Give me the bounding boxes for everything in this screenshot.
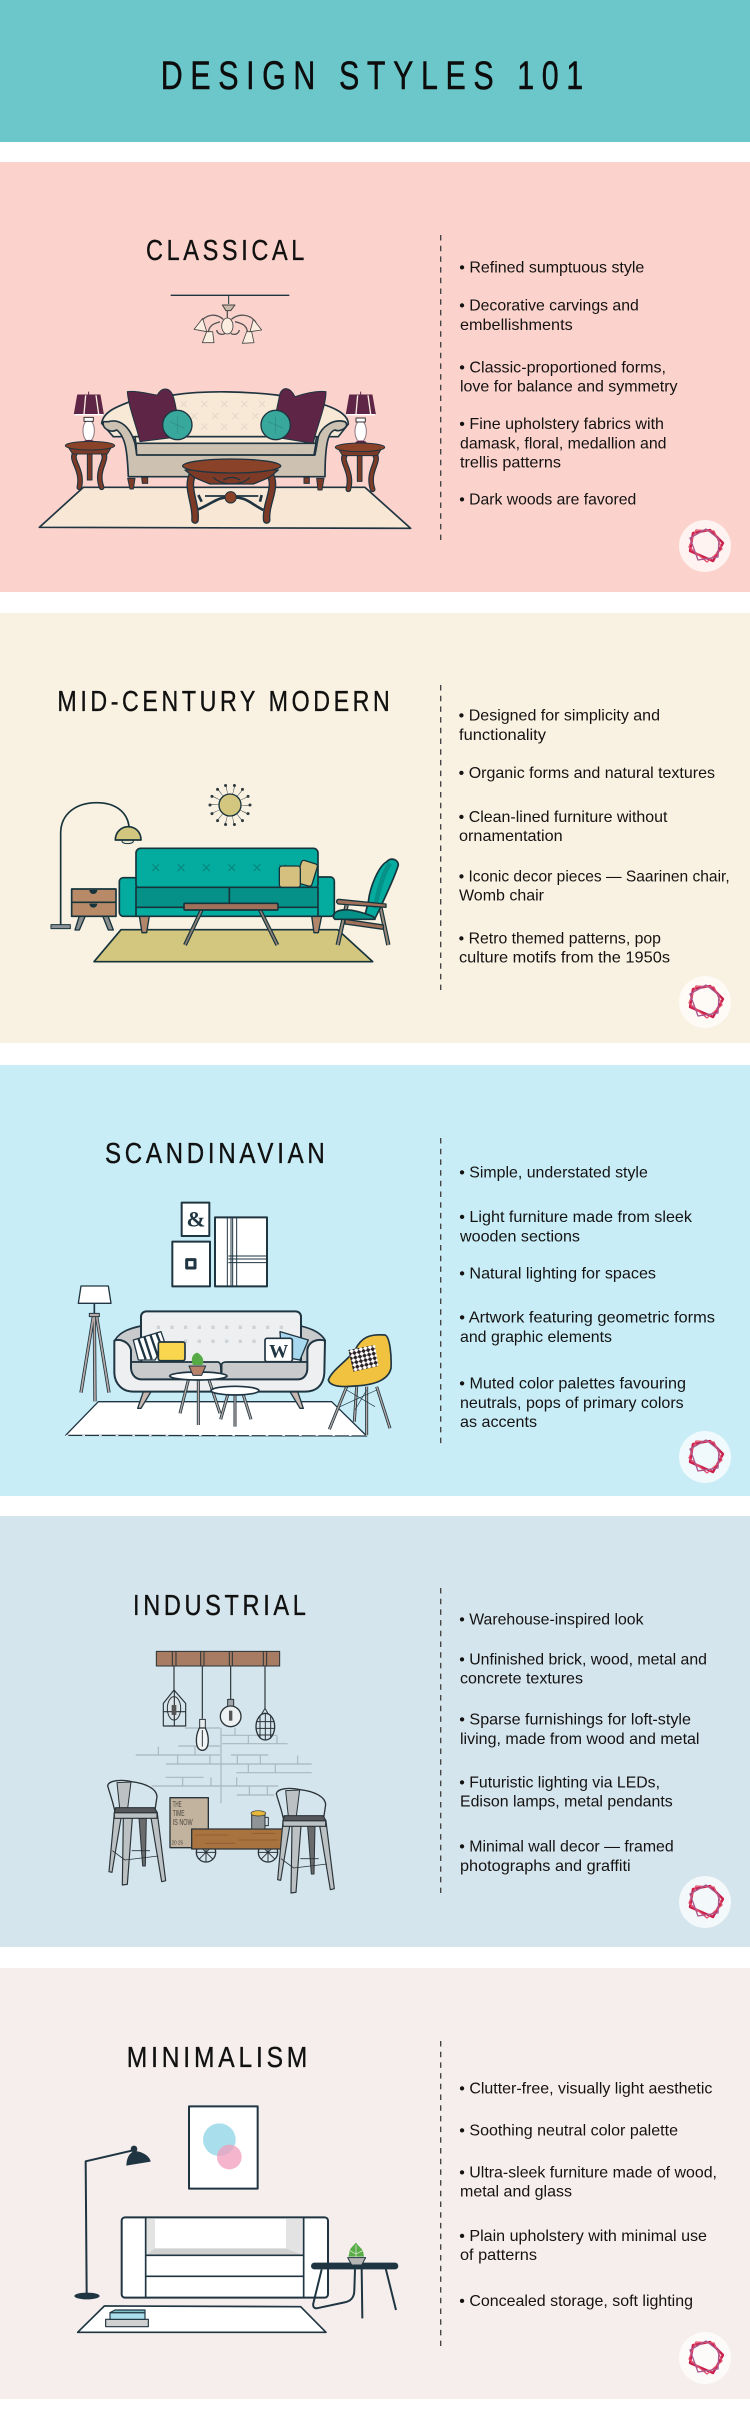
side table with plant	[311, 2243, 398, 2318]
bullet list: minimalism	[459, 2081, 717, 2310]
floor lamp	[51, 803, 141, 929]
panel: minimalism	[0, 1968, 750, 2399]
rug	[39, 487, 411, 528]
panel: scandinavian	[0, 1065, 750, 1496]
sofa	[114, 1311, 325, 1408]
header banner	[0, 0, 750, 142]
yellow chair	[328, 1335, 391, 1435]
dashed divider	[440, 1588, 442, 1893]
bullet list: minimalism: • Plain upholstery with minimal use	[459, 2228, 707, 2245]
bullet list: industrial: • Sparse furnishings for loft-style	[459, 1712, 691, 1729]
bullet list: industrial: • Warehouse-inspired look	[459, 1611, 644, 1628]
bullet list: mid-century: • Organic forms and natural textures	[459, 765, 715, 782]
bullet list: minimalism: of patterns	[460, 2247, 537, 2264]
sofa	[122, 2217, 328, 2298]
illustration: scandinavian living room	[66, 1203, 391, 1436]
illustration: industrial loft	[108, 1651, 334, 1893]
heading: industrial: INDUSTRIAL	[133, 1590, 310, 1622]
logo badge	[679, 520, 731, 572]
panel: mid-century modern	[0, 613, 750, 1043]
bullet list: classical: • Decorative carvings and	[459, 298, 639, 315]
bullet list: industrial: • Futuristic lighting via LEDs,	[459, 1774, 660, 1791]
dashed divider	[440, 685, 442, 990]
sofa	[119, 848, 334, 933]
bullet list: classical: damask, floral, medallion and	[460, 435, 666, 452]
wall art: &	[187, 1207, 205, 1232]
wheeled cart table	[192, 1811, 285, 1862]
poster: TIME	[173, 1808, 185, 1818]
bullet list: classical: • Fine upholstery fabrics with	[459, 416, 664, 433]
bullet list: mid-century: ornamentation	[459, 828, 563, 845]
bullet list: scandinavian: • Artwork featuring geometric forms	[459, 1310, 715, 1327]
bullet list: classical	[459, 260, 678, 509]
bullet list: scandinavian: neutrals, pops of primary colors	[460, 1395, 684, 1412]
bullet list: minimalism: • Clutter-free, visually light aesthetic	[459, 2081, 713, 2098]
heading: mid-century modern: MID-CENTURY MODERN	[57, 686, 393, 718]
poster: IS NOW	[173, 1817, 193, 1827]
bullet list: scandinavian: and graphic elements	[460, 1329, 612, 1346]
bullet list: minimalism: • Soothing neutral color palette	[459, 2123, 678, 2140]
bullet list: industrial	[459, 1611, 707, 1875]
dashed divider	[440, 2041, 442, 2346]
panel: classical	[0, 162, 750, 592]
dashed divider	[440, 235, 442, 540]
title: DESIGN STYLES 101	[161, 54, 591, 98]
bullet list: classical: love for balance and symmetry	[460, 378, 678, 395]
bullet list: scandinavian: as accents	[460, 1414, 537, 1431]
bullet list: scandinavian: • Natural lighting for spaces	[459, 1265, 656, 1282]
chandelier	[171, 295, 289, 343]
framed art	[189, 2106, 258, 2189]
bullet list: mid-century: functionality	[459, 727, 546, 744]
bullet list: minimalism: metal and glass	[460, 2184, 572, 2201]
bullet list: industrial: photographs and graffiti	[460, 1858, 631, 1875]
illustration: mid-century living room	[51, 785, 398, 962]
sofa	[102, 389, 348, 490]
bullet list: scandinavian: • Light furniture made from sleek	[459, 1209, 692, 1226]
sunburst clock	[210, 785, 250, 825]
bullet list: scandinavian	[459, 1165, 715, 1431]
bullet list: classical: • Dark woods are favored	[459, 492, 636, 509]
rug	[66, 1402, 367, 1436]
poster	[170, 1798, 208, 1848]
bullet list: scandinavian: wooden sections	[459, 1228, 580, 1245]
bullet list: mid-century: • Iconic decor pieces — Saarinen chair,	[459, 869, 730, 886]
bullet list: industrial: • Minimal wall decor — framed	[459, 1839, 674, 1856]
lamps and side tables	[65, 392, 385, 489]
logo badge	[679, 1876, 731, 1928]
panel: industrial	[0, 1516, 750, 1947]
logo badge	[679, 976, 731, 1028]
brick wall	[136, 1728, 312, 1803]
heading: scandinavian: SCANDINAVIAN	[105, 1138, 328, 1170]
wall art	[172, 1203, 267, 1286]
bullet list: mid-century: • Retro themed patterns, pop	[459, 931, 661, 948]
coffee table	[184, 903, 278, 945]
bullet list: minimalism: • Concealed storage, soft lighting	[459, 2293, 693, 2310]
pillows: W	[269, 1342, 289, 1363]
bullet list: classical: trellis patterns	[460, 454, 561, 471]
nightstand	[72, 889, 116, 930]
bullet list: mid-century: • Clean-lined furniture without	[459, 809, 668, 826]
bullet list: mid-century: Womb chair	[459, 888, 544, 905]
illustration: classical living room	[39, 295, 411, 528]
rug	[94, 930, 373, 962]
coffee table	[183, 459, 281, 520]
bullet list: industrial: concrete textures	[460, 1671, 583, 1688]
heading: minimalism: MINIMALISM	[127, 2042, 311, 2074]
illustration: minimalist living room	[74, 2106, 398, 2332]
heading: classical: CLASSICAL	[146, 235, 308, 267]
rug	[78, 2306, 326, 2332]
bullet list: classical: • Refined sumptuous style	[459, 260, 644, 277]
bullet list: mid-century	[459, 708, 730, 967]
bullet list: mid-century: culture motifs from the 1950s	[459, 950, 670, 967]
pendant lights	[163, 1666, 275, 1750]
bullet list: scandinavian: • Simple, understated style	[459, 1165, 648, 1182]
wooden beam	[156, 1651, 280, 1666]
side tables and plant	[170, 1353, 259, 1427]
books	[106, 2310, 148, 2327]
poster: 20 25	[172, 1840, 183, 1846]
bullet list: classical: embellishments	[460, 317, 573, 334]
bullet list: mid-century: • Designed for simplicity and	[459, 708, 660, 725]
bullet list: industrial: Edison lamps, metal pendants	[460, 1793, 673, 1810]
dashed divider	[440, 1138, 442, 1445]
bullet list: industrial: living, made from wood and metal	[460, 1731, 700, 1748]
armchair	[333, 859, 398, 945]
bullet list: classical: • Classic-proportioned forms,	[459, 359, 666, 376]
poster: THE	[173, 1799, 182, 1809]
pillows	[133, 1332, 308, 1363]
logo badge	[679, 1431, 731, 1483]
logo badge	[679, 2332, 731, 2384]
bullet list: minimalism: • Ultra-sleek furniture made of wood,	[459, 2164, 717, 2181]
bar stool left	[108, 1780, 166, 1885]
bullet list: industrial: • Unfinished brick, wood, metal and	[459, 1651, 707, 1668]
bar stool right	[276, 1788, 334, 1893]
bullet list: scandinavian: • Muted color palettes favouring	[459, 1376, 686, 1393]
mug	[251, 1811, 268, 1829]
tripod lamp	[78, 1286, 111, 1401]
floor lamp	[74, 2146, 151, 2299]
